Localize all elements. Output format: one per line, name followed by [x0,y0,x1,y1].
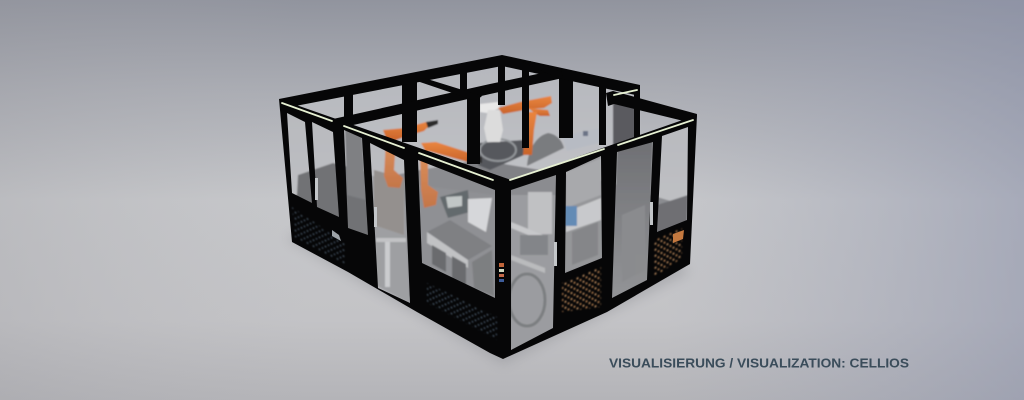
robot grippers [426,120,482,163]
machine: left dark station [296,162,368,235]
interior floor [296,160,684,350]
perforation: orange right [654,228,682,277]
walls with window openings [279,99,697,359]
top beams: rear rim [279,55,640,108]
top beams: inner cross [333,61,563,128]
orange robot: left [383,122,428,188]
table with workpieces [478,140,524,170]
machine: front door zone [509,192,557,350]
rear walls [288,66,653,175]
orange sign on right panel [673,230,684,243]
credit caption: VISUALISIERUNG / VISUALIZATION: CELLIOS [609,356,909,370]
machine: door zone [370,175,410,303]
black frame [279,55,697,359]
perforation: blue center [427,283,497,340]
cell interior [282,60,690,350]
glass tint over panes [287,113,688,350]
orange robot: center [420,142,470,208]
rear posts [344,57,640,164]
machine: center zone [426,190,494,295]
door handles [315,178,653,266]
perforation: orange center [562,267,601,312]
orange robot: rear right [498,96,552,155]
machine: right center zone [565,156,602,273]
status lights [499,263,504,282]
perforation: blue left [292,207,345,265]
logo on left panel [332,230,341,241]
saw disc [527,133,564,166]
grey gripper unit [562,128,600,151]
LED light strips [282,90,693,180]
machine: right zone [612,99,688,300]
white robot [480,102,503,142]
floor shadow [286,200,690,364]
top rim: notch [606,91,697,124]
